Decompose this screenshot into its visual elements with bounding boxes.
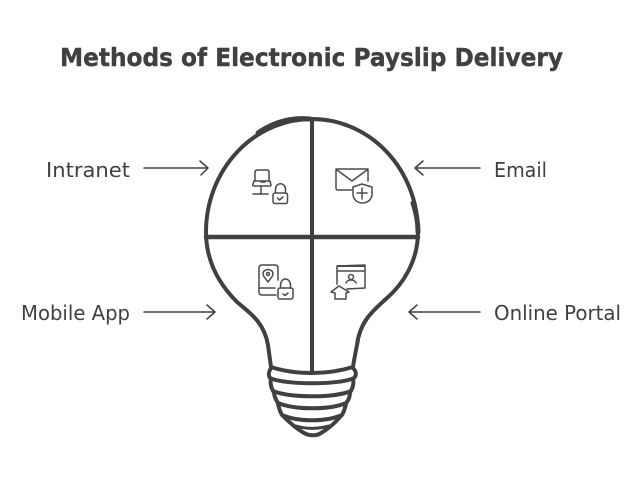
icon: envelope with shield — [336, 169, 372, 203]
icon: phone with lock — [259, 265, 293, 299]
arrow: Online Portal — [409, 305, 480, 319]
screw base — [269, 368, 356, 435]
light bulb — [206, 119, 418, 435]
thick right edge — [413, 203, 418, 232]
label: Intranet: Intranet — [46, 158, 130, 182]
bulb outline — [206, 119, 418, 373]
title: Methods of Electronic Payslip Delivery — [60, 43, 563, 72]
label: Online Portal: Online Portal — [494, 301, 621, 325]
vertical divider — [310, 120, 314, 373]
arrow: Mobile App — [144, 305, 215, 319]
horizontal divider — [206, 235, 418, 239]
thick top highlight — [258, 119, 310, 133]
label: Email: Email — [494, 158, 547, 182]
icon: computer with lock — [253, 170, 288, 204]
icon: portal with house — [331, 265, 365, 299]
label: Mobile App: Mobile App — [21, 301, 130, 325]
arrow: Intranet — [144, 161, 208, 175]
arrow: Email — [415, 161, 480, 175]
